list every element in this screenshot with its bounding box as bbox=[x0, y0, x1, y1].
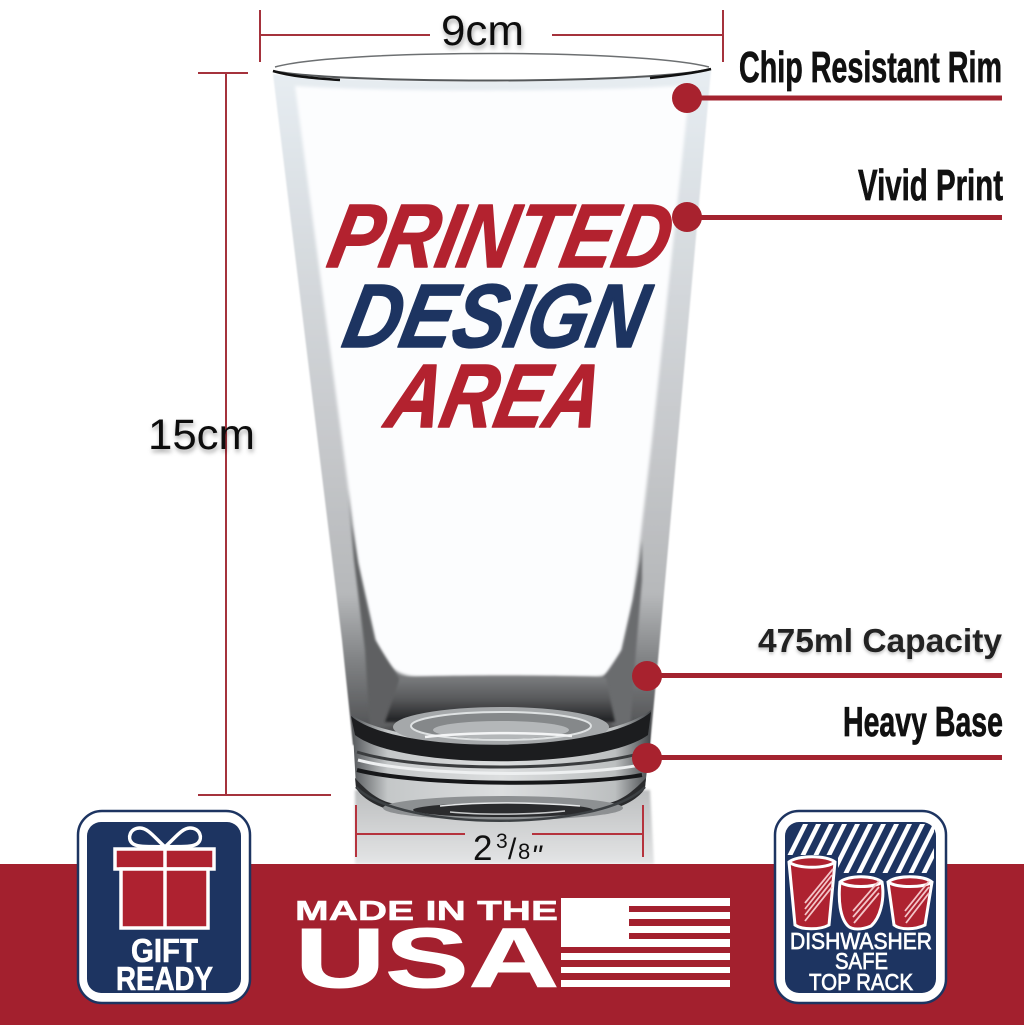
icon: round glass bbox=[839, 877, 883, 929]
icon: short glass bbox=[888, 877, 932, 929]
gift ready text bbox=[116, 932, 213, 997]
dishwasher safe text: DISHWASHER bbox=[790, 928, 932, 954]
AREA: AREA bbox=[377, 347, 612, 447]
base dimension bbox=[356, 805, 643, 873]
icon: american flag bbox=[561, 898, 730, 987]
water stripes bbox=[788, 824, 934, 873]
usa text: USA bbox=[295, 911, 559, 1005]
icon: gift box bbox=[115, 828, 214, 928]
made in the text: MADE IN THE bbox=[295, 895, 558, 926]
15cm label: 15cm bbox=[148, 411, 255, 459]
base width label: / bbox=[508, 833, 517, 866]
base ring dark lines bbox=[357, 752, 645, 767]
dishwasher safe text: SAFE bbox=[835, 948, 888, 974]
printed design area text bbox=[321, 187, 682, 447]
red banner bbox=[0, 864, 1024, 1025]
dishwasher safe text: TOP RACK bbox=[809, 969, 914, 995]
inner base ellipse bbox=[393, 707, 609, 747]
pint glass bbox=[273, 52, 711, 821]
capacity label: 475ml Capacity bbox=[758, 622, 1003, 659]
icon: tall glass bbox=[789, 857, 835, 929]
dishwasher safe badge bbox=[775, 811, 950, 1003]
9cm label: 9cm bbox=[441, 7, 524, 55]
rim bbox=[273, 52, 711, 82]
gift ready text: READY bbox=[116, 960, 213, 997]
base width label: " bbox=[531, 840, 543, 873]
gift ready text: GIFT bbox=[131, 932, 198, 969]
gift ready badge bbox=[78, 811, 250, 1003]
glass reflection on the surface bbox=[355, 790, 654, 864]
left wall spine shadow bbox=[348, 490, 400, 730]
base width label: 2 bbox=[473, 829, 492, 868]
callout: capacity bbox=[632, 622, 1003, 691]
right wall spine shadow bbox=[603, 540, 642, 730]
base ring highlight bbox=[358, 760, 640, 773]
made in the usa logo bbox=[295, 895, 730, 1005]
base width label: 8 bbox=[518, 839, 530, 864]
width dimension: 9cm bbox=[260, 7, 723, 62]
PRINTED: PRINTED bbox=[321, 187, 682, 287]
glass body walls bbox=[273, 70, 711, 745]
base underside bbox=[383, 796, 623, 820]
callout: chip resistant rim bbox=[672, 43, 1002, 113]
inner floor shadow bbox=[385, 676, 615, 722]
solid base bbox=[352, 710, 651, 819]
dishwasher safe text bbox=[790, 928, 932, 995]
dark base crescent bbox=[351, 712, 651, 761]
height dimension: 15cm bbox=[148, 73, 331, 795]
callout: heavy base bbox=[632, 698, 1003, 773]
callout: vivid print bbox=[672, 161, 1003, 232]
inner clear area bbox=[295, 85, 690, 677]
DESIGN: DESIGN bbox=[336, 267, 659, 367]
base width label: 3 bbox=[496, 830, 508, 853]
